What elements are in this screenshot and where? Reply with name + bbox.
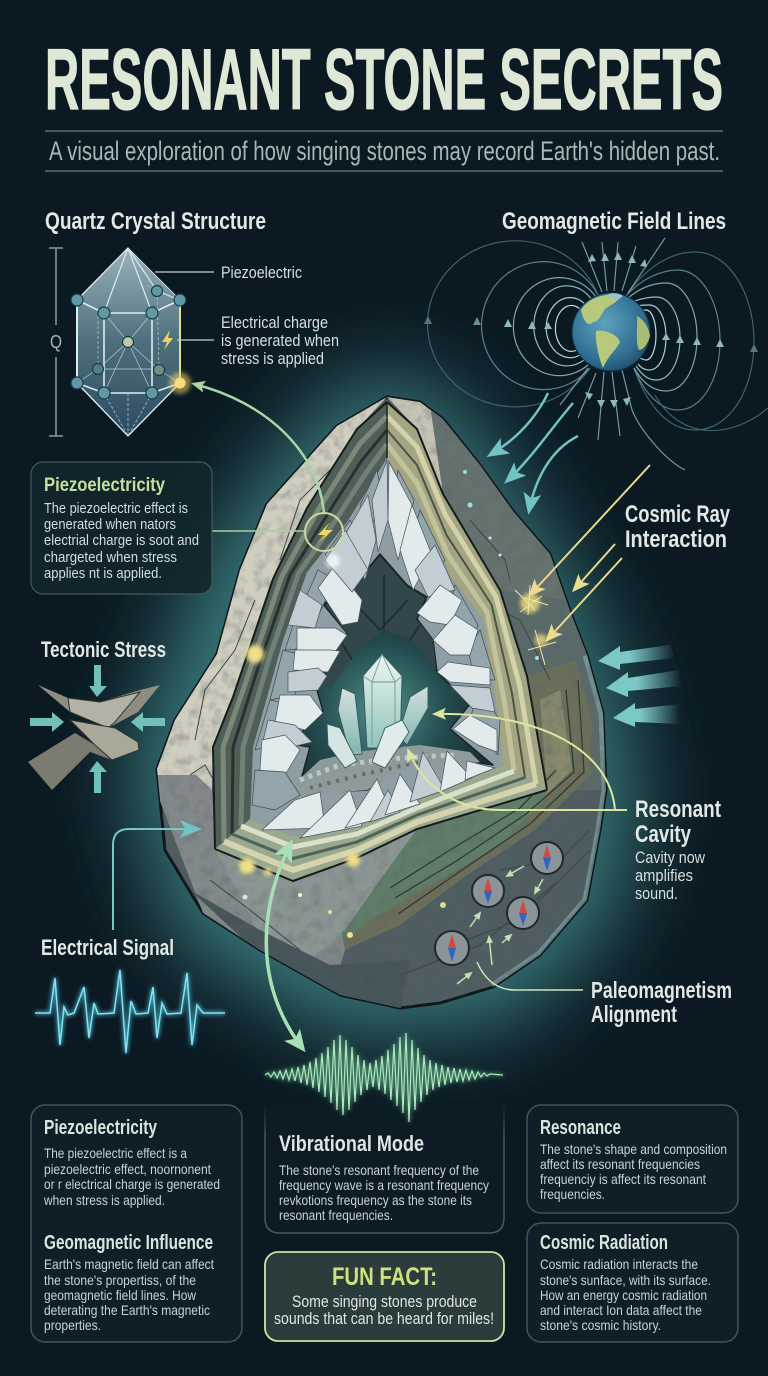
label: resonant cavity: Cavity bbox=[635, 821, 691, 848]
body: vibrational mode bbox=[279, 1162, 489, 1223]
body: piezoelectricity callout bbox=[44, 500, 199, 582]
central crystals bbox=[327, 654, 428, 768]
outer light edge right bbox=[493, 655, 606, 987]
label: electrical charge: is generated when bbox=[221, 331, 339, 350]
body: geomagnetic influence: Earth's magnetic field can affect bbox=[44, 1256, 214, 1272]
label: piezoelectric: Piezoelectric bbox=[221, 263, 302, 282]
panel: geomagnetic field lines bbox=[424, 208, 768, 470]
body: fun fact: Some singing stones produce bbox=[292, 1293, 477, 1311]
wedge: left bands bbox=[213, 402, 387, 849]
body: vibrational mode: The stone's resonant frequency of the bbox=[279, 1162, 479, 1178]
light outer crust bbox=[150, 397, 387, 790]
rock body bbox=[157, 397, 606, 1008]
body: piezoelectricity callout: The piezoelectric effect is bbox=[44, 500, 188, 517]
crystal wall shards bbox=[252, 460, 500, 838]
central cavity bbox=[290, 554, 493, 796]
body: piezoelectricity: when stress is applied. bbox=[43, 1192, 165, 1208]
body: geomagnetic influence: geomagnetic field lines. How bbox=[44, 1287, 197, 1303]
arrows: cosmic rays bbox=[530, 465, 650, 640]
body: piezoelectricity callout: generated when nators bbox=[44, 516, 176, 533]
body: vibrational mode: resonant frequencies. bbox=[279, 1207, 393, 1223]
arrow: vibration double headed bbox=[266, 843, 303, 1049]
label: resonant cavity: Cavity now bbox=[635, 848, 706, 867]
heading: cosmic radiation: Cosmic Radiation bbox=[540, 1232, 668, 1254]
panel border: vibrational mode background bbox=[265, 1105, 504, 1233]
label: paleomagnetism alignment bbox=[591, 977, 732, 1027]
field line loops bbox=[427, 241, 768, 431]
icon: compression arrows bbox=[30, 665, 165, 793]
body: piezoelectricity bbox=[43, 1145, 220, 1208]
body: piezoelectricity: or r electrical charge is generated bbox=[44, 1176, 220, 1192]
label: electrical charge: Electrical charge bbox=[221, 313, 328, 332]
panel: tectonic stress bbox=[28, 637, 166, 793]
body: vibrational mode: revkotions frequency as the stone its bbox=[279, 1192, 472, 1208]
label: electrical charge bbox=[177, 313, 339, 368]
paleomagnetic compasses bbox=[435, 842, 563, 984]
body: cosmic radiation: stone's sunface, with its surface. bbox=[540, 1272, 711, 1288]
body: geomagnetic influence: deterating the Earth's magnetic bbox=[44, 1302, 210, 1318]
body: piezoelectricity callout: electrial charge is soot and bbox=[44, 532, 199, 549]
panel: piezoelectricity callout bbox=[31, 462, 212, 594]
teal glow behind rock bbox=[125, 370, 640, 1035]
arrows: right side radiation bbox=[598, 645, 682, 727]
icon: rock slabs bbox=[28, 685, 160, 790]
crystal diagram bbox=[71, 248, 191, 436]
panel: resonance bbox=[527, 1105, 738, 1213]
body: vibrational mode: frequency wave is a resonant frequency bbox=[279, 1177, 489, 1193]
label: cosmic ray interaction: Interaction bbox=[625, 526, 727, 553]
label: resonant cavity: sound. bbox=[635, 884, 678, 903]
body: cosmic radiation: How an energy cosmic radiation bbox=[540, 1287, 707, 1303]
body: fun fact bbox=[274, 1293, 494, 1328]
label: resonant cavity bbox=[635, 796, 721, 903]
heading: electrical signal: Electrical Signal bbox=[41, 935, 174, 960]
sparkles bbox=[239, 470, 556, 938]
crystal rubble floor bbox=[293, 745, 480, 796]
heading: tectonic stress: Tectonic Stress bbox=[41, 637, 166, 662]
rock cross-section bbox=[150, 390, 620, 1020]
panel: cosmic radiation bbox=[527, 1223, 738, 1342]
compass 1 bbox=[531, 842, 563, 874]
lower left dark crust bbox=[150, 775, 345, 1000]
leader: paleomagnetism bbox=[477, 962, 583, 990]
polar field lines bbox=[560, 238, 685, 470]
panel: vibrational mode bbox=[279, 1131, 489, 1223]
body: resonance: frequenciy is affect its resonant bbox=[540, 1171, 706, 1187]
back wall rock bbox=[316, 556, 436, 690]
body: piezoelectricity callout: chargeted when stress bbox=[44, 549, 177, 566]
heading: resonance: Resonance bbox=[540, 1117, 621, 1139]
icon: earth bbox=[572, 293, 650, 371]
body: resonance: affect its resonant frequencies bbox=[540, 1156, 700, 1172]
body: cosmic radiation: Cosmic radiation interacts the bbox=[540, 1256, 698, 1272]
label: cosmic ray interaction bbox=[625, 501, 730, 553]
wedge: crystal wall base bbox=[250, 458, 503, 836]
heading: fun fact: FUN FACT: bbox=[332, 1263, 437, 1291]
panel: fun fact bbox=[265, 1252, 504, 1341]
wedge: right bands bbox=[387, 402, 547, 790]
body: resonance: The stone's shape and composition bbox=[540, 1141, 727, 1157]
body: piezoelectricity: piezoelectric effect, noornonent bbox=[44, 1161, 211, 1177]
heading: quartz: Quartz Crystal Structure bbox=[45, 208, 266, 235]
body: geomagnetic influence: properties. bbox=[44, 1317, 101, 1333]
label: paleomagnetism alignment: Alignment bbox=[591, 1001, 677, 1027]
field arrowheads bbox=[424, 252, 758, 408]
body: cosmic radiation: stone's cosmic history. bbox=[540, 1317, 661, 1333]
dimension bar Q bbox=[49, 248, 63, 436]
panel: electrical signal bbox=[35, 935, 225, 1053]
panel: piezoelectricity and geomagnetic card bbox=[31, 1105, 242, 1342]
body: cosmic radiation bbox=[540, 1256, 711, 1333]
stone texture bbox=[150, 390, 620, 1020]
upper right grey crust bbox=[430, 405, 590, 676]
arrow: crystal link from rock to quartz bbox=[194, 384, 324, 513]
label: electrical charge: stress is applied bbox=[221, 349, 324, 368]
alignment arrows bbox=[457, 866, 543, 984]
dimension bar Q: Q bbox=[50, 332, 62, 352]
chart: vibrational sound wave bbox=[265, 1033, 503, 1122]
crust cracks bbox=[190, 470, 590, 975]
body: resonance: frequencies. bbox=[540, 1186, 605, 1202]
piezo callout circle and leader bbox=[212, 513, 343, 551]
arrows: geomagnetic field into rock bbox=[490, 393, 578, 511]
heading: piezoelectricity: Piezoelectricity bbox=[44, 1117, 158, 1139]
body: geomagnetic influence: the stone's propertiss, of the bbox=[44, 1272, 196, 1288]
body: resonance bbox=[540, 1141, 727, 1202]
compass 3 bbox=[507, 897, 539, 929]
chart: electrical waveform bbox=[35, 970, 225, 1053]
body: cosmic radiation: and interact Ion data affect the bbox=[540, 1302, 702, 1318]
label: resonant cavity: Resonant bbox=[635, 796, 721, 823]
arrow: resonant cavity leaders bbox=[408, 714, 627, 810]
body: piezoelectricity callout: applies nt is applied. bbox=[44, 565, 162, 582]
body: fun fact: sounds that can be heard for miles! bbox=[274, 1310, 494, 1328]
heading: piezoelectricity callout: Piezoelectricity bbox=[44, 475, 165, 496]
heading: geomagnetic influence: Geomagnetic Influence bbox=[44, 1232, 213, 1254]
right crust banding bbox=[333, 660, 592, 952]
arrow: electrical signal to rock bbox=[113, 829, 198, 930]
heading: vibrational mode: Vibrational Mode bbox=[279, 1131, 424, 1156]
panel: quartz crystal structure bbox=[45, 208, 339, 436]
body: geomagnetic influence bbox=[44, 1256, 214, 1333]
label: resonant cavity: amplifies bbox=[635, 866, 693, 885]
compass 2 bbox=[472, 875, 504, 907]
body: piezoelectricity: The piezoelectric effect is a bbox=[44, 1145, 187, 1161]
label: cosmic ray interaction: Cosmic Ray bbox=[625, 501, 730, 528]
compass 4 bbox=[435, 931, 469, 965]
wedge: bottom bands bbox=[215, 765, 547, 881]
